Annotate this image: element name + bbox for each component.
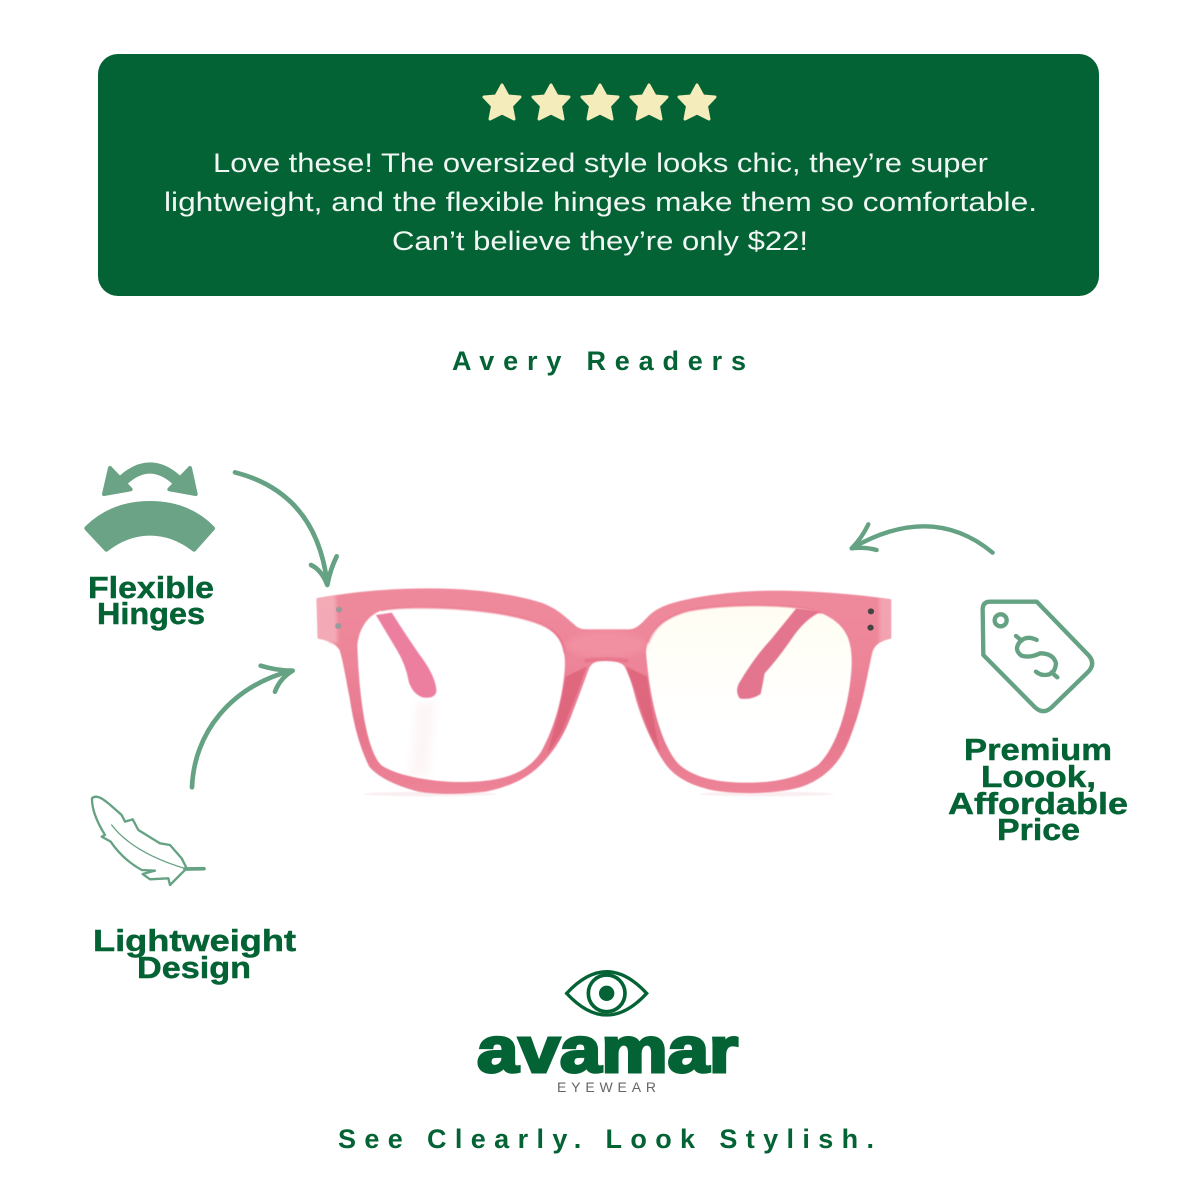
left temple xyxy=(376,613,436,698)
icon: flexible hinge xyxy=(87,468,213,549)
inner rim shade xyxy=(381,608,565,653)
sub-brand: EYEWEAR xyxy=(557,1079,656,1095)
tagline: See Clearly. Look Stylish. xyxy=(338,1124,874,1154)
product photo: pink glasses xyxy=(308,588,897,796)
label: lightweight design: Design xyxy=(137,950,251,985)
review text: Can’t believe they’re only $22! xyxy=(392,226,808,256)
logo: avamar eyewear xyxy=(477,972,738,1095)
arrow: lightweight to frame xyxy=(192,666,293,787)
arrow: hinges to frame xyxy=(235,472,337,585)
icon: five star rating xyxy=(484,85,715,119)
frame xyxy=(317,588,891,794)
label: premium look, affordable price: Affordable xyxy=(948,786,1128,821)
heading: product name: Avery Readers xyxy=(452,346,746,376)
label: flexible hinges: Hinges xyxy=(97,596,205,631)
label: premium look, affordable price: Loook, xyxy=(981,759,1096,794)
bridge highlight xyxy=(567,632,646,658)
label: premium look, affordable price xyxy=(948,732,1128,847)
icon: eye xyxy=(567,972,647,1015)
review text: Love these! The oversized style looks chic, they’re super xyxy=(213,148,988,178)
end piece highlights xyxy=(308,593,897,643)
rivets xyxy=(335,607,874,631)
icon: feather xyxy=(92,797,204,885)
inner nose shadows xyxy=(547,667,587,753)
label: premium look, affordable price: Price xyxy=(997,812,1080,847)
right lens tint xyxy=(646,605,852,783)
label: lightweight design xyxy=(93,923,296,985)
arrow: price to frame xyxy=(852,524,993,553)
right temple xyxy=(737,608,822,699)
review text: lightweight, and the flexible hinges make them so comfortable. xyxy=(164,187,1037,217)
panel: customer review xyxy=(98,54,1099,296)
wordmark: avamar xyxy=(477,1014,738,1086)
label: premium look, affordable price: Premium xyxy=(964,732,1112,767)
label: flexible hinges: Flexible xyxy=(88,570,214,605)
review text xyxy=(164,148,1037,256)
icon: price tag xyxy=(983,602,1092,711)
label: flexible hinges xyxy=(88,570,214,631)
label: lightweight design: Lightweight xyxy=(93,923,296,958)
